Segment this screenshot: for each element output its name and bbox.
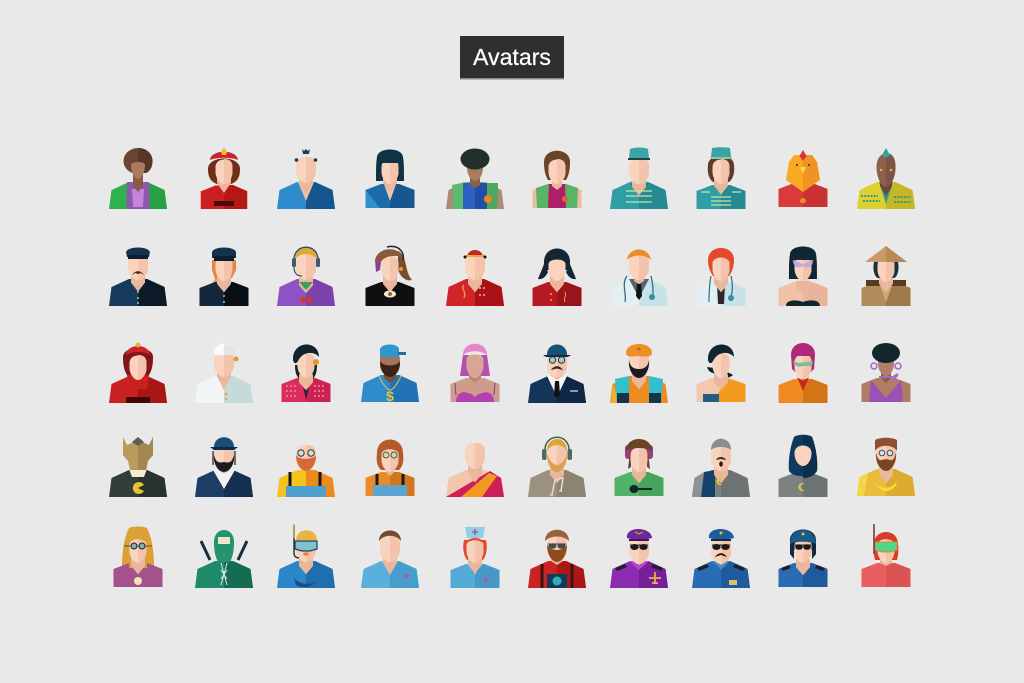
avatar: male officer with mustache bbox=[109, 248, 167, 306]
avatar: red-haired woman with glasses and overalls bbox=[366, 440, 414, 496]
avatar: woman in orange sari bbox=[696, 344, 746, 402]
avatar: female band uniform in teal bbox=[696, 147, 746, 209]
avatar: male doctor with stethoscope bbox=[610, 250, 668, 306]
avatar: firefighter woman bbox=[201, 147, 247, 209]
avatar: man with gray cap and goatee bbox=[692, 439, 750, 497]
avatar: photographer with beard and camera bbox=[528, 530, 586, 588]
avatar: woman with pink hair bbox=[450, 344, 500, 402]
avatar: call centre man with headset bbox=[277, 247, 335, 306]
row 1 of avatars bbox=[109, 147, 915, 209]
row 5 of avatars bbox=[114, 524, 910, 588]
avatar: bearded man with dark hat and navy vest bbox=[195, 437, 253, 497]
avatar: chicken mask bbox=[778, 150, 828, 207]
avatar: male band uniform in teal bbox=[610, 148, 668, 209]
avatar: woman with purple mask bbox=[778, 246, 828, 306]
avatar: green ninja with swords bbox=[195, 530, 253, 588]
avatar: man with dark afro in green vest bbox=[446, 148, 504, 209]
row 3 of avatars bbox=[109, 342, 910, 404]
avatar: woman in navy hijab bbox=[778, 435, 828, 497]
avatar: rapper with blue cap and dollar chain bbox=[361, 344, 419, 404]
avatar: bald man in red uniform bbox=[446, 250, 504, 306]
row 4 of avatars bbox=[109, 435, 915, 497]
avatar: monk with sash bbox=[446, 443, 504, 497]
avatar: snorkeler in blue shirt bbox=[277, 524, 335, 588]
avatar: woman in magenta headscarf and green glasses bbox=[778, 343, 828, 403]
avatar: pilot in purple bbox=[610, 529, 668, 588]
avatar: woman with pigtails in dark red bbox=[532, 248, 582, 306]
avatar: woman in pink patterned jacket bbox=[282, 344, 330, 402]
avatar: gentleman in bowler hat and suit bbox=[528, 344, 586, 403]
avatar: male medic in light blue bbox=[361, 530, 419, 588]
avatar: person with conical hat and tan coat bbox=[862, 246, 910, 306]
avatar: horse mask with pacman shirt bbox=[109, 437, 167, 497]
avatar: blonde woman with glasses bbox=[114, 526, 162, 587]
avatar: female officer with orange hair bbox=[200, 248, 248, 306]
avatar: alien with teal mohawk in yellow bbox=[857, 148, 915, 209]
avatar: afro man in green jacket bbox=[109, 148, 167, 209]
avatar: sailor in white bbox=[195, 343, 253, 403]
avatar: policewoman with helmet bbox=[778, 530, 828, 587]
avatar: woman with afro and purple hoops bbox=[862, 343, 910, 402]
title badge bbox=[460, 36, 564, 80]
avatar: bald plumber with glasses and overalls bbox=[277, 445, 335, 497]
avatar: rapper with blue cap and dollar chain: $ bbox=[386, 388, 394, 404]
avatar: policeman with mustache bbox=[692, 529, 750, 588]
avatar: bearded man with banana shirt bbox=[857, 438, 915, 496]
avatar: woman with ponytail and headset bbox=[366, 246, 414, 306]
avatar: man with topknot in blue suit bbox=[277, 149, 335, 209]
avatar: female doctor with red hair bbox=[696, 248, 746, 306]
avatar: woman with brown hair in green vest bbox=[532, 151, 582, 208]
avatar: woman with black bob in blue bbox=[366, 150, 414, 208]
avatar: woman with red hair, green goggles and snorkel bbox=[862, 524, 910, 587]
avatar: nurse with red hair bbox=[450, 527, 500, 588]
avatar grid bbox=[109, 147, 915, 588]
avatar: man with headphones and music notes bbox=[528, 437, 586, 497]
avatar: young person with brown hair and guitar shirt bbox=[614, 439, 664, 496]
avatar: bearded man with orange turban and vest bbox=[610, 344, 668, 403]
title badge: Avatars bbox=[473, 44, 551, 70]
avatar: red hooded firefighter bbox=[109, 342, 167, 403]
row 2 of avatars bbox=[109, 246, 910, 306]
